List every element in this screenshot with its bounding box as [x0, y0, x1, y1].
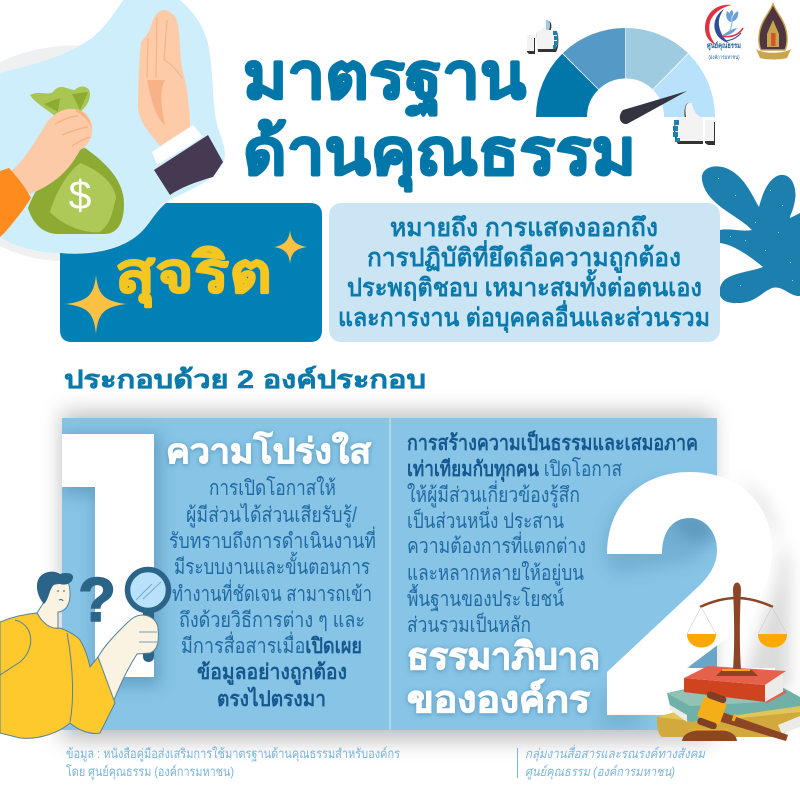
- component 2 text: ให้ผู้มีส่วนเกี่ยวข้องรู้สึก: [407, 480, 580, 508]
- component 1 text: ถึงด้วยวิธีการต่าง ๆ และ: [179, 609, 365, 632]
- icon: question mark: ?: [78, 566, 116, 635]
- icon: small sparkle: [274, 230, 307, 264]
- component 1 text: ผู้มีส่วนได้ส่วนเสียรับรู้/: [186, 503, 357, 528]
- definition text: ประพฤติชอบ เหมาะสมทั้งต่อตนเอง: [347, 268, 702, 302]
- person face details: [57, 591, 65, 601]
- component 2 emphasis: ขององค์กร: [407, 679, 590, 720]
- illustration: person with magnifier: [0, 566, 168, 738]
- component 2 text: เท่าเทียมกับทุกคน เปิดโอกาส: [407, 457, 622, 483]
- panel: definition: [329, 203, 720, 342]
- icon: thumbs up bottom: [673, 103, 715, 145]
- footer source: โดย ศูนย์คุณธรรม (องค์การมหาชน): [66, 764, 234, 780]
- icon: teal book: [667, 686, 800, 722]
- footer credit: กลุ่มงานสื่อสารและรณรงค์ทางสังคม: [525, 744, 706, 762]
- logo caption: ศูนย์คุณธรรม: [707, 41, 741, 51]
- panel: term สุจริต: [60, 203, 322, 342]
- divider: [390, 418, 391, 730]
- definition text: หมายถึง การแสดงออกถึง: [390, 214, 658, 242]
- logo: temple emblem: [756, 4, 791, 60]
- component 1 text: ทำงานที่ชัดเจน สามารถเข้า: [172, 579, 372, 606]
- illustration: refusing a money bag: [0, 10, 223, 237]
- component 1 text: ข้อมูลอย่างถูกต้อง: [197, 660, 347, 686]
- title line 1: มาตรฐาน: [243, 40, 526, 117]
- component 1 text: รับทราบถึงการดำเนินงานที่: [169, 526, 376, 553]
- illustration: books, scales and gavel: [657, 582, 800, 741]
- icon: dark suit sleeve: [154, 135, 223, 195]
- component 2 emphasis: ธรรมาภิบาล: [407, 636, 600, 677]
- icon: gavel: [682, 690, 788, 741]
- person neck and face: [37, 582, 70, 628]
- logo: moral center: [705, 5, 743, 61]
- footer credit: ศูนย์คุณธรรม (องค์การมหาชน): [525, 764, 675, 780]
- icon: thumbs up top: [527, 20, 558, 54]
- title line 2: ด้านคุณธรรม: [243, 116, 636, 192]
- icon: money bag: [28, 87, 124, 234]
- component 2 text: การสร้างความเป็นธรรมและเสมอภาค: [407, 429, 698, 455]
- heading: สุจริต: สุจริต: [115, 241, 272, 308]
- component 1 text: [169, 476, 376, 711]
- panel: two components: [62, 418, 775, 730]
- title: [243, 40, 636, 192]
- component 1 text: การเปิดโอกาสให้: [209, 476, 336, 500]
- subheading: ประกอบด้วย 2 องค์ประกอบ: [64, 365, 426, 394]
- icon: bottom yellow book: [657, 703, 800, 737]
- numeral 1 and 2 shadows: [62, 434, 717, 730]
- icon: large sparkle: [66, 275, 126, 334]
- grey shadow blob: [0, 46, 170, 261]
- panel shadow: [62, 412, 712, 740]
- icon: hand holding bag: [10, 109, 92, 194]
- footer source: ข้อมูล : หนังสือคู่มือส่งเสริมการใช้มาตรฐานด้านคุณธรรมสำหรับองค์กร: [66, 746, 400, 762]
- icon: magnifier: [128, 570, 168, 662]
- person shirt folds: [0, 620, 73, 722]
- light blue illustration blob: [0, 0, 225, 253]
- component 1 text: มีระบบงานและขั้นตอนการ: [174, 552, 370, 579]
- component 1 text: ตรงไปตรงมา: [217, 686, 326, 711]
- numeral 2: [607, 472, 775, 715]
- gauge chart: [536, 28, 715, 124]
- icon: raised hand: [138, 10, 190, 146]
- component 2 text: พื้นฐานของประโยชน์: [407, 584, 564, 611]
- numeral 2 outer shadow: [740, 480, 790, 690]
- component 2 text: ส่วนรวมเป็นหลัก: [407, 611, 531, 637]
- numeral 1: [62, 434, 154, 677]
- icon: money bag: $: [69, 172, 92, 218]
- definition text: [338, 214, 710, 334]
- definition text: และการงาน ต่อบุคคลอื่นและส่วนรวม: [338, 300, 710, 334]
- component 2 emphasis: [407, 636, 600, 720]
- icon: scales: [687, 582, 787, 676]
- person arm and hand: [90, 615, 158, 700]
- component 1 heading: ความโปร่งใส: [166, 431, 371, 471]
- component 2 text: [407, 429, 698, 637]
- icon: white shirt cuff: [152, 125, 203, 165]
- person hair: [37, 572, 73, 604]
- component 2 text: ความต้องการที่แตกต่าง: [407, 531, 586, 558]
- gauge needle: [620, 91, 687, 124]
- splash shape: [702, 166, 800, 303]
- footer credit: [517, 744, 706, 780]
- definition text: การปฏิบัติที่ยึดถือความถูกต้อง: [367, 240, 681, 274]
- logo: moral center: (องค์การมหาชน): [708, 54, 740, 61]
- person shirt: [0, 613, 115, 738]
- icon: red book: [684, 666, 786, 703]
- component 2 text: เป็นส่วนหนึ่ง ประสาน: [407, 506, 564, 533]
- component 2 text: และหลากหลายให้อยู่บน: [407, 561, 584, 586]
- icon: orange sleeve: [0, 168, 31, 237]
- component 1 text: มีการสื่อสารเมื่อเปิดเผย: [181, 631, 362, 658]
- footer source: [66, 746, 400, 780]
